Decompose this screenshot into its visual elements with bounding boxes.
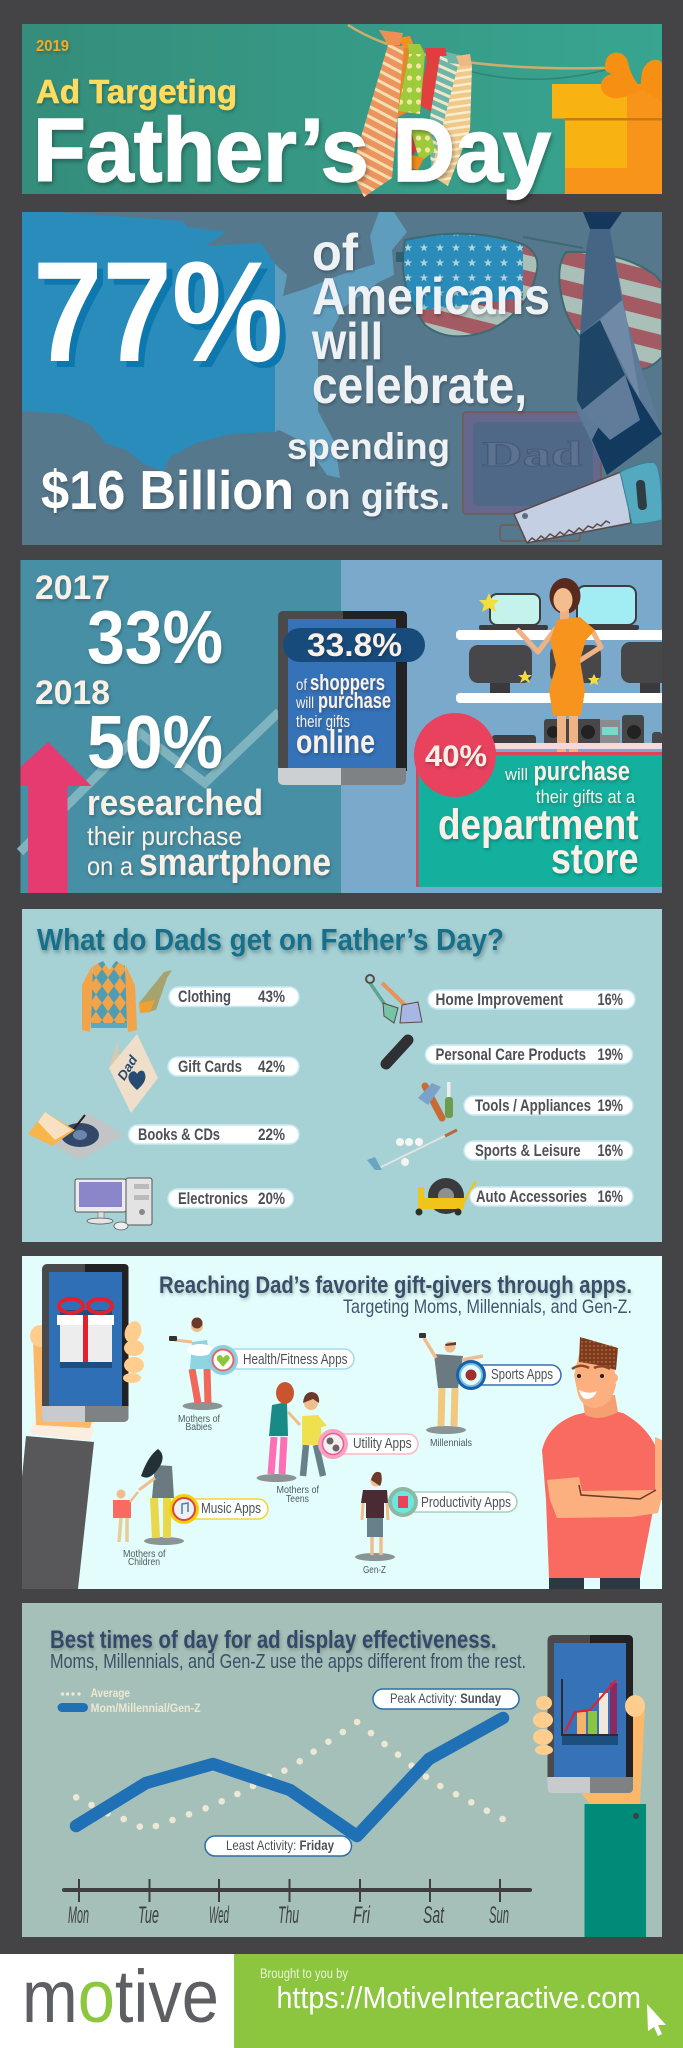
text: 2017 33% 2018 50% researched: 2017: [35, 569, 110, 607]
text: of Americans will celebrate: on gifts.: [305, 476, 450, 517]
icon: book and turntable: [28, 1112, 124, 1160]
text: of Americans will celebrate: of: [312, 224, 359, 282]
pill: Clothing: Clothing: [178, 988, 231, 1006]
text: 33.8% of shoppers: their gifts: [296, 712, 350, 731]
pill: Music Apps: Music Apps: [201, 1500, 261, 1517]
pill: Productivity Apps: Productivity Apps: [421, 1494, 511, 1511]
arrow: up: [20, 742, 92, 893]
callout: 40% department store: department: [438, 801, 638, 849]
icon: tablet with Dad: Dad: [482, 434, 582, 474]
logo: motive: motive: [22, 1955, 219, 2038]
chart: mom millennial gen-z line: [76, 1718, 503, 1836]
pill: Sports and Leisure: 16%: [598, 1142, 623, 1160]
store shelves: [456, 578, 662, 752]
pill: Personal Care Products: 19%: [598, 1046, 623, 1064]
stat: $16 Billion: $16 Billion: [41, 459, 294, 521]
pill: Auto Accessories: Auto Accessories: [476, 1188, 587, 1206]
callout: 40% department store: will: [504, 765, 528, 784]
subheading: Targeting Moms, Millennials, and Gen-Z.: [343, 1297, 632, 1318]
icon: tablet with Dad: [463, 412, 601, 541]
label: Mothers of Teens: Teens: [286, 1493, 309, 1505]
pill: Auto Accessories: 16%: [598, 1188, 623, 1206]
callout: least activity: Least Activity: Friday: [226, 1837, 334, 1853]
figure: millennial: [419, 1333, 483, 1434]
pill: Gift Cards: Gift Cards: [178, 1058, 242, 1076]
icon: cursor: [647, 2004, 666, 2036]
chart: axis: Thu: [278, 1902, 299, 1929]
text: 33.8% of shoppers: will: [295, 695, 314, 712]
text: 2019: 2019: [36, 38, 69, 55]
icon: gift card: Dad: [114, 1052, 141, 1083]
text: of Americans will celebrate: spending: [287, 426, 450, 467]
pill: Sports Apps: Sports Apps: [491, 1366, 553, 1383]
panel: title banner: [22, 24, 662, 201]
text: 2017 33% 2018 50% researched: researched: [87, 782, 263, 823]
heading: Best times of day for ad display effectiveness.: [50, 1626, 496, 1654]
text: 2017 33% 2018 50% researched: on a: [87, 851, 133, 881]
stars: [479, 593, 600, 685]
icon: tablet: [278, 611, 425, 785]
callout: least activity: [205, 1836, 352, 1856]
icon: computer: [75, 1178, 152, 1230]
icon: necktie: [577, 212, 662, 475]
text: 2017 33% 2018 50% researched: 2018: [35, 674, 110, 712]
label: Mothers of Babies: Mothers of: [178, 1413, 220, 1425]
pill: Tools and Appliances: Tools / Appliances: [475, 1097, 591, 1115]
icon: sweater and tie: [82, 961, 172, 1032]
pill: Books and CDs: [128, 1125, 299, 1144]
figure: mother of babies: [169, 1318, 222, 1410]
chart: axis: [62, 1879, 532, 1929]
chart: axis: Mon: [68, 1902, 89, 1929]
text: of Americans will celebrate: celebrate,: [312, 357, 527, 415]
legend: Average: [91, 1686, 130, 1700]
woman: [517, 578, 601, 752]
text: 33.8% of shoppers: purchase: [318, 688, 391, 713]
pill: Personal Care Products: Personal Care Products: [436, 1046, 586, 1064]
callout: 40% department store: 40%: [425, 740, 487, 773]
string of ties: [348, 25, 605, 197]
label: Gen-Z: Gen-Z: [363, 1564, 386, 1576]
icon: hand holding phone with chart: [533, 1635, 646, 1937]
map of USA: [22, 212, 407, 478]
pill: Productivity Apps: [388, 1487, 517, 1517]
illustration: smiling man: [542, 1337, 662, 1589]
text: 33.8% of shoppers: [295, 627, 402, 760]
stereo: [492, 715, 662, 745]
pill: Clothing: [169, 987, 299, 1006]
icon: golf club and balls: [367, 1130, 457, 1170]
legend: [58, 1686, 201, 1715]
text: 33.8% of shoppers: of: [296, 677, 307, 694]
pill: Gift Cards: 42%: [258, 1058, 285, 1076]
text: 2017 33% 2018 50% researched: their purchase: [87, 821, 242, 851]
subheading: Moms, Millennials, and Gen-Z use the apps different from the rest.: [50, 1651, 526, 1673]
chart: axis: Tue: [138, 1902, 159, 1929]
counter edge: [494, 743, 662, 749]
icon: hand saw: [514, 462, 662, 543]
label: Mothers of Babies: [178, 1413, 220, 1433]
pill: Clothing: 43%: [258, 988, 285, 1006]
panel: best times for ad display: [22, 1603, 662, 1937]
trend line: [20, 712, 279, 852]
pill: Health/Fitness Apps: [208, 1345, 354, 1375]
text: of Americans will celebrate: will: [311, 313, 383, 371]
text: website url: https://MotiveInteractive.com: [276, 1980, 641, 2015]
chart: axis: Wed: [209, 1902, 229, 1929]
figure: Gen-Z: [355, 1472, 395, 1561]
label: Mothers of Teens: Mothers of: [276, 1484, 319, 1496]
footer: [0, 1954, 683, 2048]
pill: Books and CDs: 22%: [258, 1126, 285, 1144]
pill: Gift Cards: [168, 1057, 299, 1076]
chart: axis: Fri: [353, 1902, 370, 1929]
icon: gift box: [552, 53, 662, 194]
text: 2017 33% 2018 50% researched: 33%: [87, 595, 223, 679]
callout: peak activity: Peak Activity: Sunday: [390, 1690, 501, 1706]
chart: average dotted line: [73, 1719, 506, 1830]
chart: axis: Sat: [423, 1902, 445, 1929]
chart: axis: Sun: [489, 1902, 509, 1929]
callout: peak activity: [373, 1689, 519, 1709]
text: 2017 33% 2018 50% researched: [35, 569, 331, 884]
label: Mothers of Children: [123, 1548, 166, 1568]
pill: Home Improvement: Home Improvement: [436, 991, 563, 1009]
panel: what do dads get: [22, 909, 662, 1242]
icon: sunglasses: [396, 232, 662, 370]
figure: mothers of children: [113, 1449, 184, 1545]
pill: Health/Fitness Apps: Health/Fitness Apps: [243, 1351, 348, 1368]
icon: gift card: [109, 1034, 158, 1113]
text: brought to you by: Brought to you by: [260, 1965, 348, 1981]
pill: Electronics: Electronics: [178, 1190, 248, 1208]
panel: 77 percent of Americans: [22, 212, 670, 545]
icon: car jack and tire: [416, 1178, 476, 1216]
label: Mothers of Babies: Babies: [186, 1421, 212, 1433]
text: 2017 33% 2018 50% researched: smartphone: [139, 842, 331, 884]
pill: Music Apps: [169, 1494, 268, 1524]
text: 2017 33% 2018 50% researched: 50%: [87, 700, 223, 784]
pill: Sports and Leisure: Sports & Leisure: [475, 1142, 581, 1160]
callout: 40% department store: purchase: [534, 756, 630, 786]
pill: Electronics: 20%: [258, 1190, 285, 1208]
figure: mothers of teens: [256, 1382, 327, 1482]
text: 33.8% of shoppers: online: [296, 723, 375, 760]
label: Millennials: Millennials: [430, 1437, 472, 1449]
panel: reaching gift-givers through apps: [22, 1256, 662, 1589]
text: of Americans will celebrate: Americans: [312, 268, 550, 326]
label: Mothers of Teens: [276, 1484, 319, 1505]
stat: 77%: 77%: [33, 233, 283, 392]
icon: hand holding phone with gift: [22, 1264, 144, 1589]
callout: 40% department store: their gifts at a: [536, 787, 636, 807]
monitors: [469, 586, 671, 693]
callout: 40% department store: [414, 713, 662, 887]
icon: trimmer: [386, 1040, 408, 1064]
label: Mothers of Children: Children: [128, 1556, 160, 1568]
icon: shovels: [366, 975, 422, 1023]
heading: What do Dads get on Father’s Day?: [37, 922, 504, 957]
title: Father's Day: Father’s Day: [33, 101, 551, 201]
pill: Books and CDs: Books & CDs: [138, 1126, 220, 1144]
pill: Utility Apps: Utility Apps: [353, 1435, 412, 1452]
pill: Tools and Appliances: 19%: [598, 1097, 623, 1115]
text: 33.8% of shoppers: 33.8%: [307, 627, 402, 663]
pill: Sports Apps: [456, 1360, 561, 1390]
text: Ad Targeting: Ad Targeting: [36, 73, 237, 110]
icon: hammer and screwdriver: [418, 1082, 453, 1118]
pill: Utility Apps: [318, 1429, 418, 1459]
pill: Home Improvement: 16%: [598, 991, 623, 1009]
callout: 40% department store: store: [551, 835, 638, 883]
text: of Americans will celebrate: [287, 224, 550, 517]
label: Mothers of Children: Mothers of: [123, 1548, 166, 1560]
legend: Mom/Millennial/Gen-Z: [91, 1701, 201, 1715]
text: 33.8% of shoppers: shoppers: [310, 670, 385, 695]
pill: Electronics: [168, 1189, 294, 1208]
panel: smartphone research and shopping: [20, 560, 671, 893]
